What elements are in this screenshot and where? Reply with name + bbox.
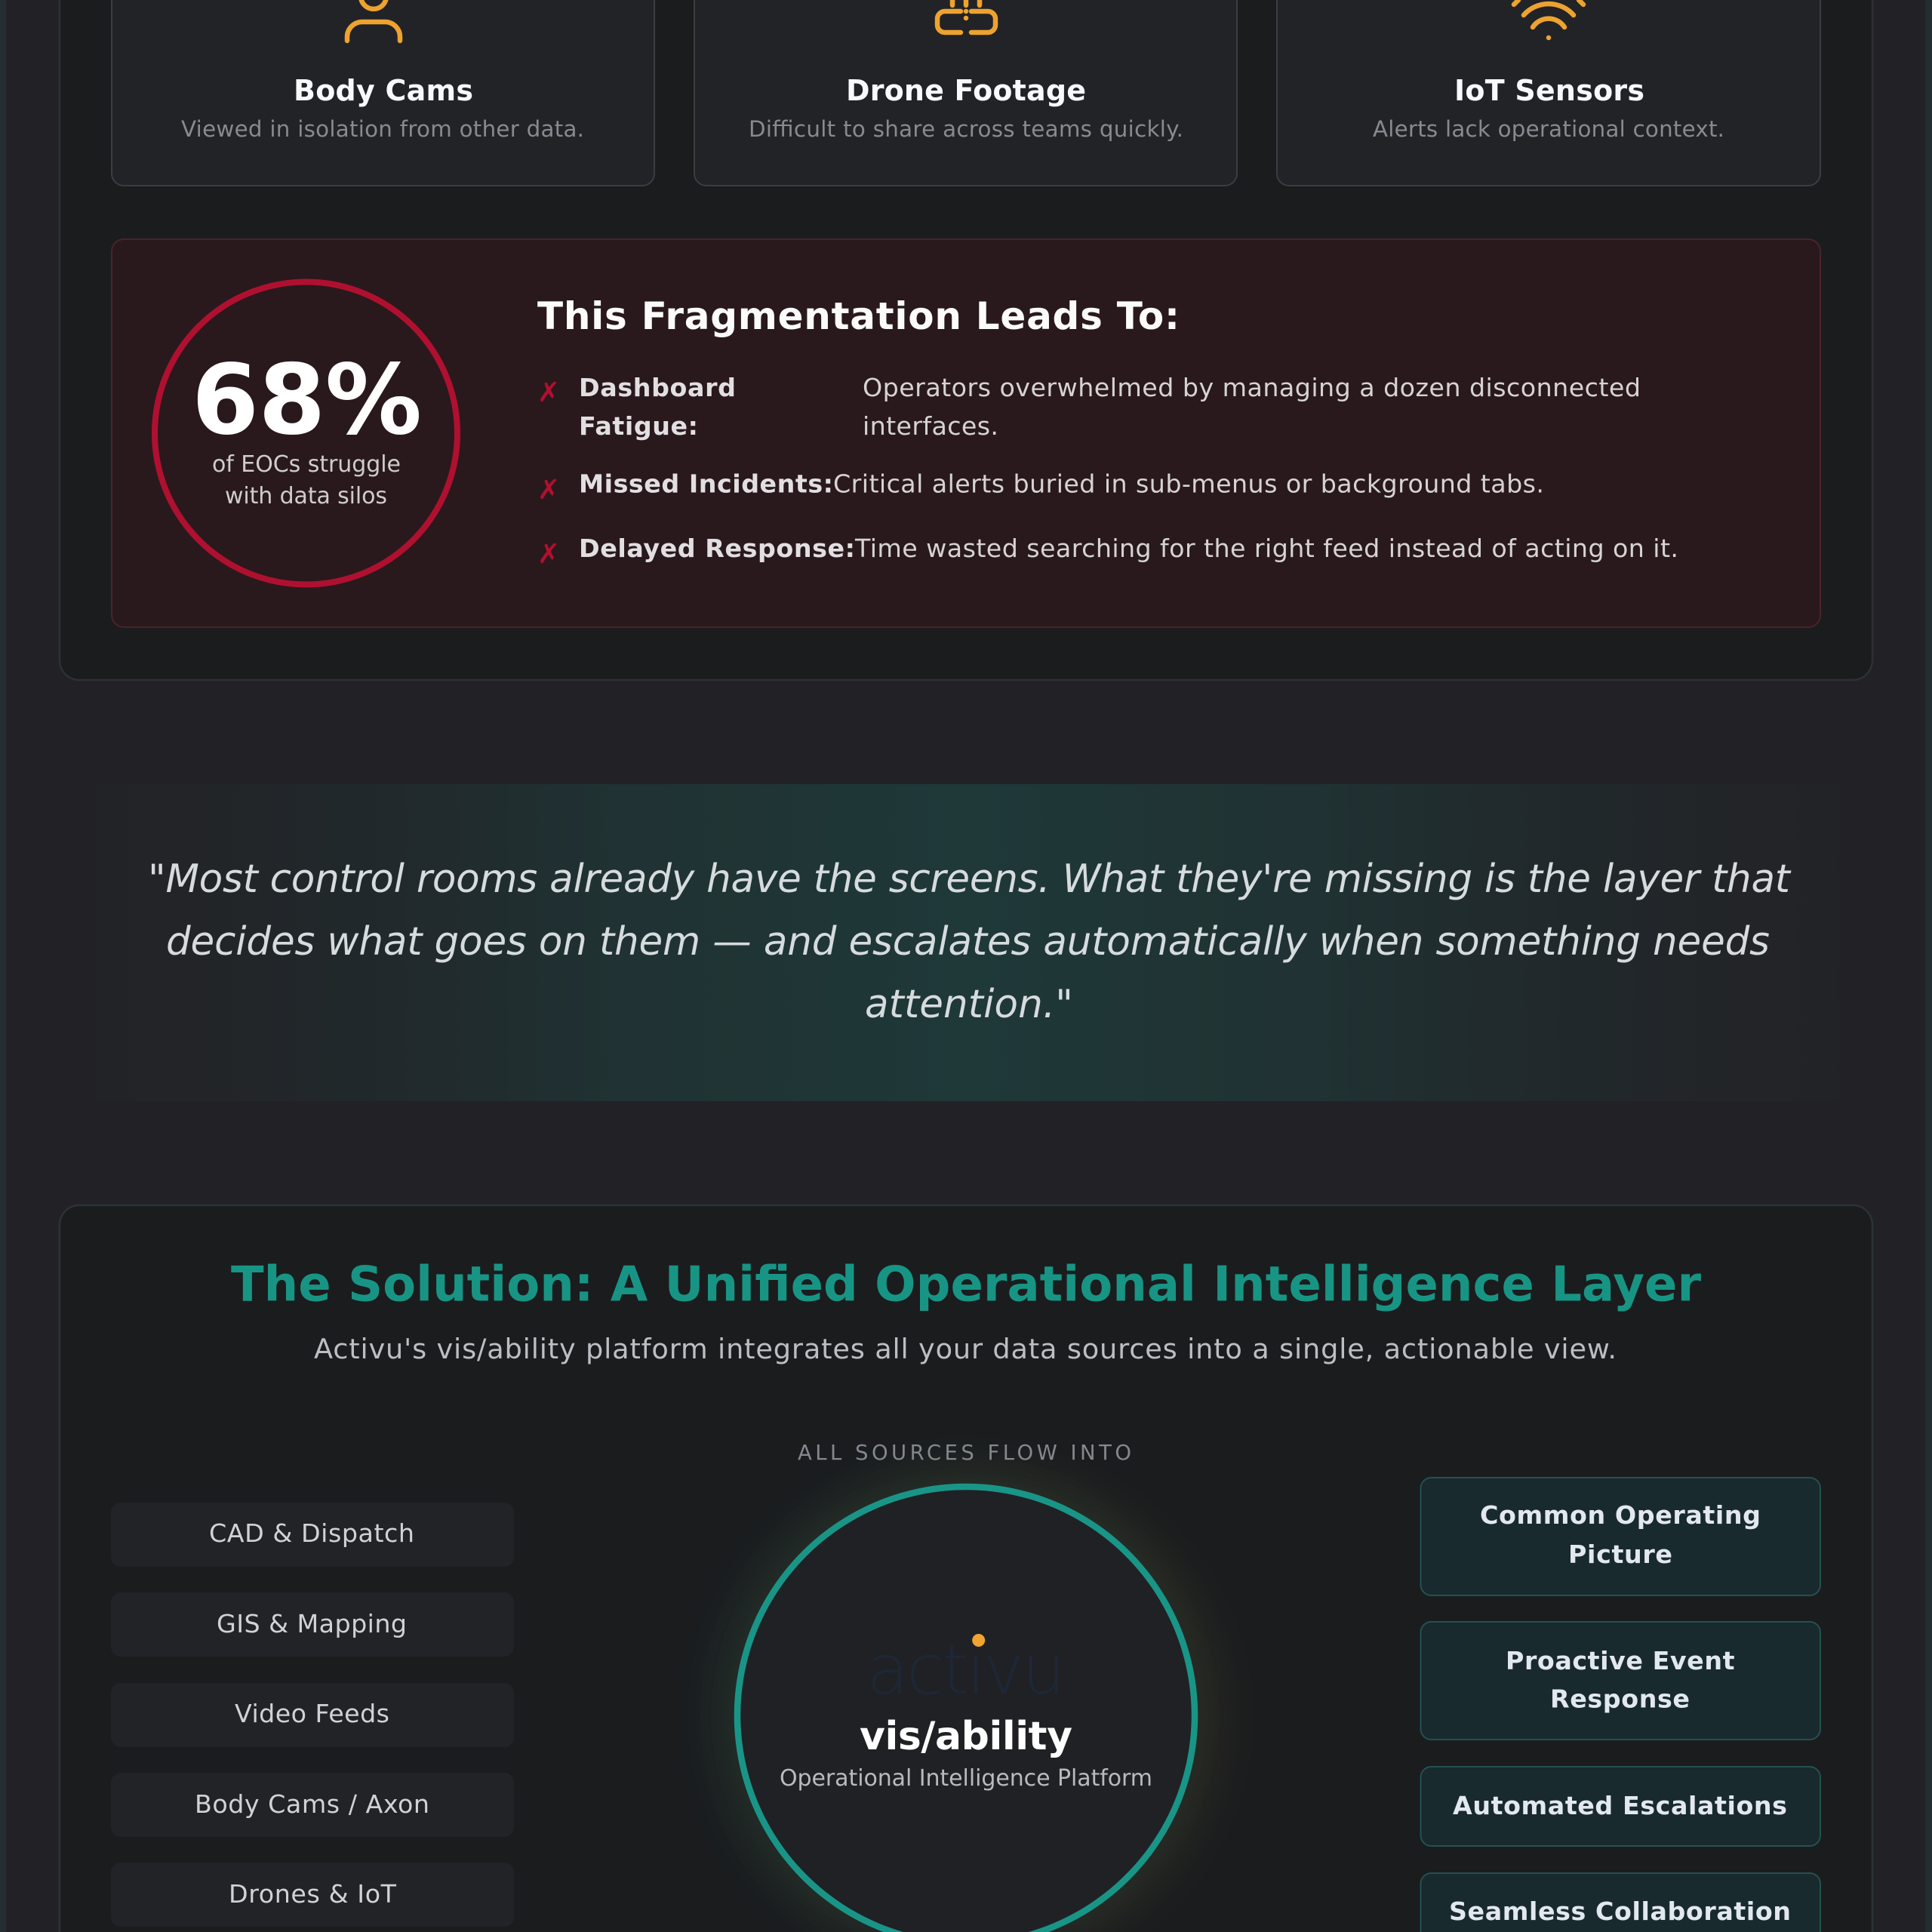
card title: Body Cams <box>294 74 473 107</box>
source: body cams: Body Cams / Axon <box>195 1789 429 1819</box>
source: gis: GIS & Mapping <box>217 1609 407 1638</box>
source: cad: CAD & Dispatch <box>209 1518 414 1548</box>
logo: activu: activu <box>866 1629 1066 1710</box>
list item: dashboard fatigue: Dashboard <box>579 373 736 402</box>
icon: drone <box>937 0 995 32</box>
outcomes list <box>1420 1478 1820 1932</box>
quote band <box>59 784 1873 1101</box>
list item: missed incidents: Missed Incidents: <box>579 469 833 498</box>
list item: dashboard fatigue <box>537 373 1641 441</box>
card: iot sensors <box>1277 0 1820 186</box>
hub circle: vis/ability: vis/ability <box>860 1714 1072 1759</box>
quote band: "Most control rooms already have the screens. What they're missing is the layer that <box>148 857 1792 902</box>
outcome: common operating picture <box>1420 1478 1820 1595</box>
source: body cams <box>111 1773 514 1837</box>
flow label: ALL SOURCES FLOW INTO <box>798 1441 1131 1465</box>
heading: this fragmentation leads to: This Fragmentation Leads To: <box>537 294 1180 338</box>
source: video <box>111 1683 514 1747</box>
hub circle: vis/ability <box>715 1472 1218 1932</box>
icon: wifi <box>1514 0 1583 38</box>
list item: delayed response: Time wasted searching for the right feed instead of acting on it. <box>854 534 1678 563</box>
list item: missed incidents: Critical alerts buried in sub-menus or background tabs. <box>833 469 1544 498</box>
panel: consequences <box>112 239 1820 627</box>
card description: Difficult to share across teams quickly. <box>749 116 1183 142</box>
outcome: automated escalations: Automated Escalations <box>1453 1791 1787 1820</box>
card description: Viewed in isolation from other data. <box>181 116 584 142</box>
list item: dashboard fatigue: interfaces. <box>863 411 998 441</box>
outcome: common operating picture: Common Operating <box>1480 1500 1761 1530</box>
source: gis <box>111 1592 514 1657</box>
outcome: common operating picture: Picture <box>1568 1540 1672 1569</box>
outcome: proactive event response: Proactive Event <box>1506 1646 1735 1675</box>
stat circle: 68% <box>155 282 457 584</box>
outcome: proactive event response: Response <box>1550 1684 1690 1713</box>
source: video: Video Feeds <box>235 1699 389 1728</box>
outcome: seamless collaboration: Seamless Collaboration <box>1449 1897 1791 1926</box>
outcome: automated escalations <box>1420 1767 1820 1846</box>
list item: dashboard fatigue: Operators overwhelmed by managing a dozen disconnected <box>863 373 1641 402</box>
list item: delayed response: Delayed Response: <box>579 534 855 563</box>
stat circle: 68%: with data silos <box>225 483 387 509</box>
heading: the solution: The Solution: A Unified Operational Intelligence Layer <box>231 1257 1701 1313</box>
list item: missed incidents: ✗ <box>537 475 560 506</box>
panel: the solution <box>60 1205 1872 1932</box>
panel: the problem <box>60 0 1872 680</box>
stat circle: 68%: of EOCs struggle <box>212 451 401 478</box>
list item: dashboard fatigue: Fatigue: <box>579 411 698 441</box>
card: body cams <box>112 0 654 186</box>
icon: person <box>347 0 400 41</box>
source: cad <box>111 1503 514 1567</box>
list item: dashboard fatigue: ✗ <box>537 377 560 408</box>
list item: delayed response: ✗ <box>537 539 560 570</box>
card: drone footage <box>694 0 1237 186</box>
quote band: attention." <box>865 982 1073 1027</box>
source: drones <box>111 1863 514 1927</box>
source: drones: Drones & IoT <box>229 1879 397 1909</box>
stat circle: 68%: 68% <box>192 344 422 457</box>
card title: IoT Sensors <box>1454 74 1644 107</box>
source list <box>111 1503 514 1927</box>
outcome: proactive event response <box>1420 1622 1820 1740</box>
subheading: Activu's vis/ability platform integrates all your data sources into a single, actionable view. <box>314 1333 1617 1365</box>
card title: Drone Footage <box>846 74 1086 107</box>
list item: missed incidents <box>537 469 1544 506</box>
quote band: decides what goes on them — and escalates automatically when something needs <box>166 919 1770 964</box>
card description: Alerts lack operational context. <box>1373 116 1724 142</box>
hub circle: vis/ability: Operational Intelligence Platform <box>780 1765 1152 1792</box>
list item: delayed response <box>537 534 1678 570</box>
outcome: seamless collaboration <box>1420 1873 1820 1932</box>
